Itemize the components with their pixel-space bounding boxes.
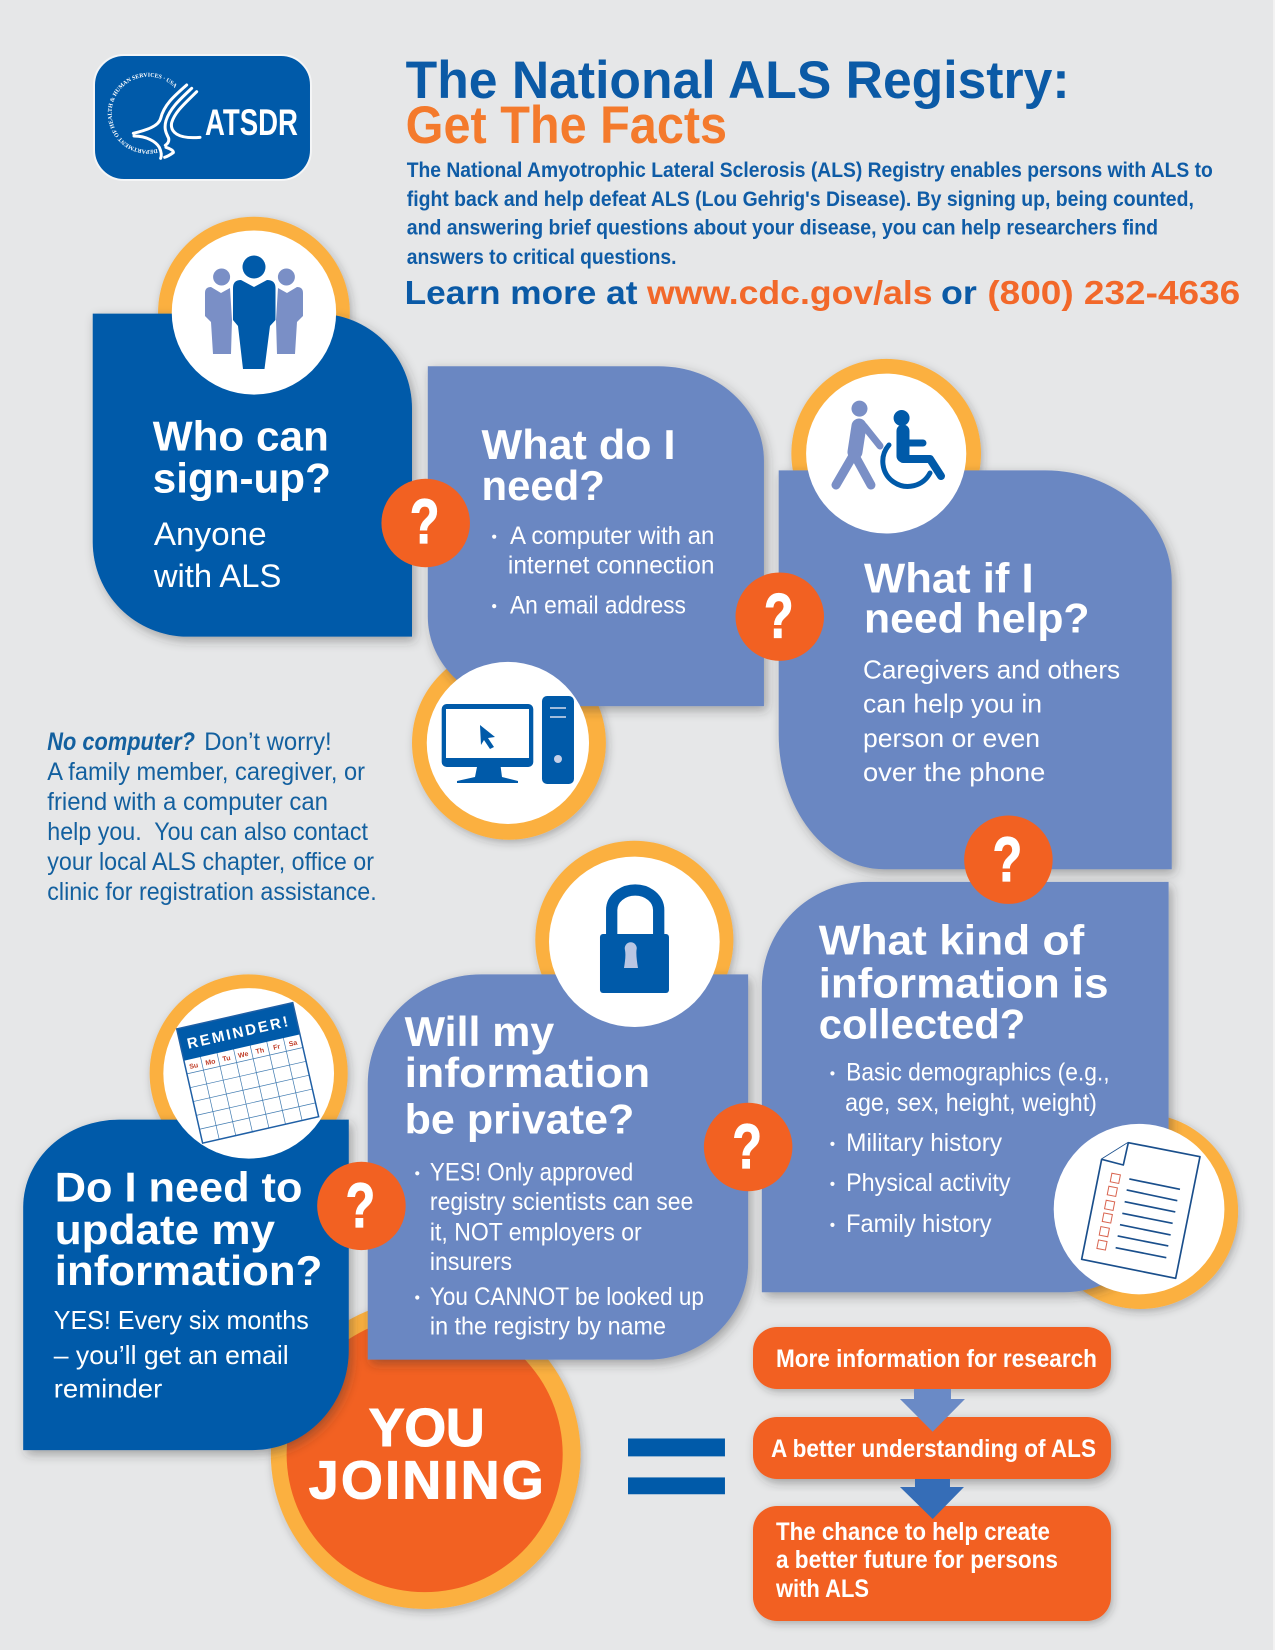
bullet list: insurers [430,1248,512,1276]
question badge 4: ? [732,1112,762,1182]
heading [405,1008,650,1142]
answer text [54,1305,309,1403]
box: better future [753,1506,1111,1621]
heading: update my [55,1206,276,1253]
heading: information [405,1049,650,1096]
icon: checklist document [1082,1143,1200,1278]
outcome flow [753,1327,1111,1621]
bullet list: in the registry by name [430,1312,666,1340]
answer text: – you’ll get an email [54,1340,289,1370]
icon: people [205,255,303,369]
bullet list: Military history [846,1129,1002,1157]
ATSDR logo: DEPARTMENT OF HEALTH & HUMAN SERVICES · USA [108,72,176,154]
heading: Do I need to [55,1164,302,1211]
question badge 2 [735,572,824,661]
bullet list [415,1159,704,1340]
icon: reminder calendar: Fr [273,1044,281,1052]
answer text: can help you in [863,688,1042,718]
icon: reminder calendar: Sa [288,1040,298,1048]
question badge 1 [381,479,470,567]
heading [819,916,1109,1048]
box: better understanding [753,1417,1111,1479]
box: better understanding: A better understanding of ALS [771,1435,1096,1463]
bullet list: age, sex, height, weight) [845,1089,1097,1117]
no computer note: Don’t worry! [204,728,332,756]
title: The National ALS Registry: [406,51,1070,110]
box: more information: More information for research [776,1345,1097,1373]
panel: what if I need help [779,359,1172,869]
intro paragraph: The National Amyotrophic Lateral Sclerosis (ALS) Registry enables persons with ALS to [407,159,1213,182]
heading: information is [819,960,1109,1007]
heading [864,554,1090,641]
bullet list: registry scientists can see [430,1188,693,1216]
arrow: first step [900,1389,965,1432]
learn more line: or [941,275,977,312]
heading: What kind of [819,916,1085,963]
heading: What if I [864,554,1034,601]
you joining circle [271,1300,581,1609]
icon: reminder calendar: REMINDER! [186,1013,290,1053]
heading: information? [55,1247,322,1294]
equals sign [628,1438,725,1494]
no computer note: your local ALS chapter, office or [47,848,374,876]
bullet list: YES! Only approved [430,1159,633,1187]
bullet list: it, NOT employers or [430,1219,642,1247]
heading [482,421,675,509]
intro paragraph [407,159,1213,269]
answer text: person or even [863,723,1040,753]
panel: will my information be private [368,841,748,1360]
icon: reminder calendar [177,1003,319,1143]
icon: caregiver and wheelchair [836,401,941,486]
icon: reminder calendar: We [238,1051,249,1060]
you joining circle: YOU [369,1398,485,1458]
icon: reminder calendar: Tu [222,1055,231,1063]
panel: what do I need [412,366,764,840]
heading: What do I [482,421,675,468]
no computer note: No computer? [47,728,195,756]
question badge 1: ? [410,487,439,557]
question badge 2: ? [764,582,793,652]
panel: do I need to update [23,974,349,1450]
heading: need help? [864,594,1090,641]
title: Get The Facts [406,96,727,155]
question badge 3: ? [993,825,1022,895]
question badge 4 [704,1103,792,1191]
box: more information [753,1327,1111,1389]
answer text: reminder [54,1373,163,1403]
heading: Will my [405,1008,555,1055]
bullet list: An email address [510,592,686,619]
heading: Who can [153,412,329,459]
icon: reminder calendar: Th [255,1047,265,1056]
answer text: YES! Every six months [54,1305,309,1335]
panel: what kind of information [762,882,1238,1309]
answer text [863,655,1120,787]
bullet list [492,522,714,619]
answer text: over the phone [863,757,1045,787]
answer text: Anyone [154,515,267,552]
heading: need? [482,462,605,509]
learn more line: www.cdc.gov/als [646,275,933,312]
question badge 5: ? [346,1171,375,1241]
answer text: Caregivers and others [863,655,1120,685]
title [406,51,1070,155]
bullet list: Family history [846,1210,992,1238]
heading: sign-up? [153,455,331,501]
bullet list: Basic demographics (e.g., [846,1059,1110,1087]
intro paragraph: and answering brief questions about your disease, you can help researchers find [407,217,1158,240]
learn more line: Learn more at [405,275,638,312]
box: better future: with ALS [775,1575,869,1603]
learn more line: (800) 232-4636 [987,275,1240,312]
learn more line [405,275,1240,312]
icon: reminder calendar: Su [189,1062,199,1071]
icon: padlock [600,890,669,993]
no computer note: clinic for registration assistance. [47,878,377,906]
arrow: second step [900,1479,964,1519]
bullet list: Physical activity [846,1169,1011,1197]
icon: reminder calendar: Mo [205,1058,216,1067]
ATSDR logo [93,54,312,181]
box: better future: The chance to help create [776,1518,1050,1546]
question badge 3 [964,816,1053,904]
no computer note [47,728,377,906]
heading: collected? [819,1001,1025,1048]
no computer note: A family member, caregiver, or [47,758,365,786]
answer text: with ALS [153,557,281,594]
heading: be private? [405,1095,634,1142]
intro paragraph: answers to critical questions. [407,246,676,269]
you joining circle: JOINING [309,1451,544,1510]
bullet list: You CANNOT be looked up [430,1283,704,1311]
icon: computer [442,696,574,784]
bullet list [830,1059,1110,1238]
no computer note: friend with a computer can [47,788,328,816]
box: better future: a better future for persons [776,1546,1058,1574]
question badge 5 [317,1162,406,1250]
bullet list: internet connection [508,552,714,579]
heading [153,412,331,501]
intro paragraph: fight back and help defeat ALS (Lou Gehrig's Disease). By signing up, being counted, [407,188,1194,211]
no computer note: help you. You can also contact [47,818,368,846]
answer text [153,515,281,594]
heading [55,1164,322,1294]
bullet list: A computer with an [510,522,714,550]
ATSDR logo: ATSDR [205,102,298,143]
panel: who can sign up [93,217,412,637]
